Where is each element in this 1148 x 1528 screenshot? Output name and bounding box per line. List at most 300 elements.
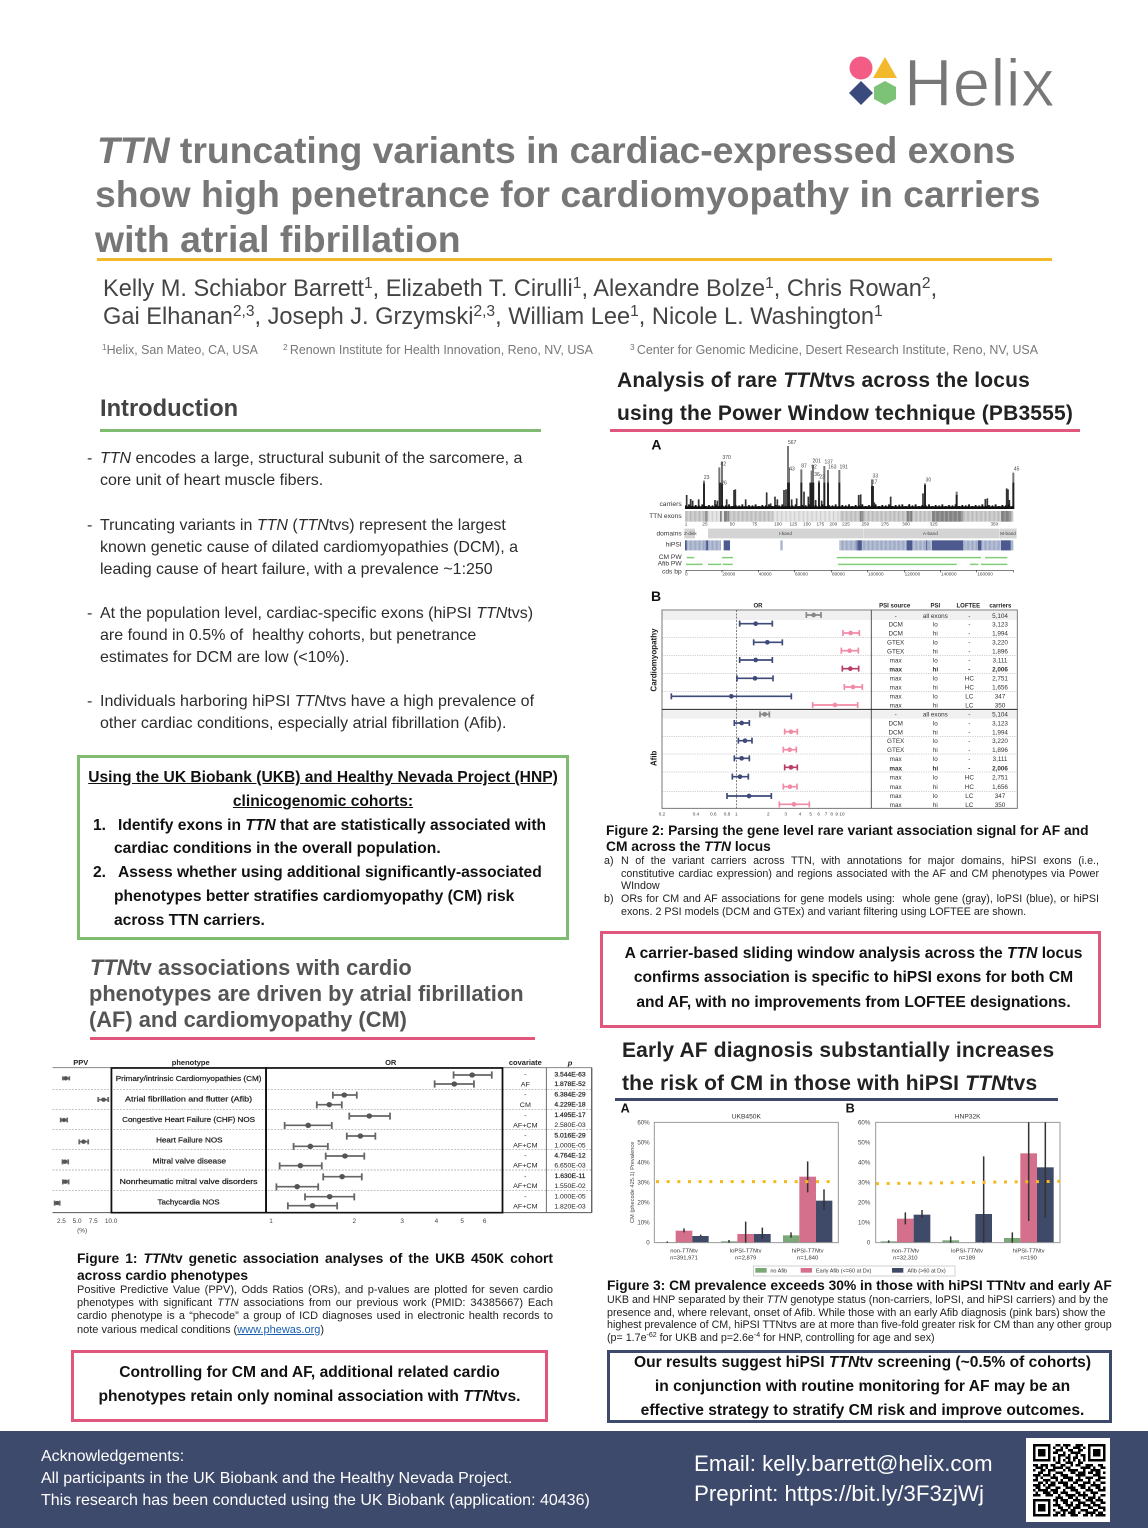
chart: figure 2B odds ratios: hi — [933, 685, 938, 692]
chart: figure 2A TTN locus: 225 — [842, 522, 850, 527]
chart: figure 1 forest plot: 1.820E-03 — [554, 1204, 586, 1210]
acknowledgements: All participants in the UK Biobank and the Healthy Nevada Project. — [41, 1470, 512, 1487]
chart: figure 2B odds ratios: HC — [965, 676, 974, 683]
footer band — [0, 1431, 1148, 1528]
chart: figure 2A TTN locus: carriers — [659, 501, 682, 508]
callout: conclusion: Our results suggest hiPSI TTNtv screening (~0.5% of cohorts) — [634, 1354, 1091, 1371]
chart: figure 2A TTN locus: I-band — [779, 531, 792, 536]
chart: figure 1 forest plot: Mitral valve disease — [152, 1157, 226, 1165]
chart: figure 1 forest plot: CM — [520, 1102, 531, 1109]
chart: figure 1 forest plot: AF — [521, 1082, 530, 1089]
chart: figure 3 bar charts: 0 — [867, 1240, 871, 1247]
chart: figure 2A TTN locus: 25 — [702, 522, 708, 527]
chart: figure 2B odds ratios: 1 — [735, 812, 738, 817]
caption: figure 1: Positive Predictive Value (PPV), Odds Ratios (ORs), and p-values are plotted for seven cardio — [77, 1284, 553, 1296]
chart: figure 3 bar charts: 50% — [637, 1139, 650, 1146]
chart: figure 2A TTN locus: 82 — [721, 461, 726, 467]
chart: figure 2A TTN locus: 100 — [774, 522, 782, 527]
chart: figure 2B odds ratios: - — [968, 622, 970, 629]
chart: figure 1 forest plot: AF+CM — [513, 1183, 538, 1190]
chart: figure 1 forest plot: AF+CM — [513, 1143, 538, 1149]
chart: figure 2B odds ratios: max — [890, 694, 902, 701]
chart: figure 2B odds ratios: 350 — [995, 703, 1006, 710]
chart: figure 2B odds ratios: all exons — [923, 613, 948, 620]
text block: introduction bullets: At the population level, cardiac-specific exons (hiPSI TTNtvs) — [100, 605, 533, 622]
chart: figure 2B odds ratios: 1,656 — [992, 784, 1008, 791]
chart: figure 1 forest plot: 1.550E-02 — [554, 1183, 586, 1190]
chart: figure 2B odds ratios: - — [968, 640, 970, 647]
chart: figure 1 forest plot: - — [524, 1133, 527, 1140]
chart: figure 1 forest plot: 1.000E-05 — [554, 1143, 586, 1149]
chart: figure 2B odds ratios: 6 — [817, 812, 820, 817]
chart: figure 1 forest plot: - — [524, 1194, 527, 1201]
chart: figure 1 forest plot: 3.544E-63 — [554, 1072, 586, 1078]
chart: figure 2B odds ratios: DCM — [888, 729, 903, 736]
chart: figure 2B odds ratios: 2,006 — [992, 765, 1008, 772]
chart: figure 2B odds ratios: 9 — [835, 812, 838, 817]
caption: figure 2: CM across the TTN locus — [606, 839, 771, 854]
chart: figure 2A TTN locus: 140000 — [941, 572, 957, 577]
chart: figure 2B odds ratios: lo — [933, 756, 938, 763]
text block: introduction bullets: other cardiac conditions, especially atrial fibrillation (Afib). — [100, 715, 506, 732]
callout: cohorts and aims: 2. — [93, 864, 106, 881]
chart: figure 2B odds ratios: - — [968, 712, 970, 719]
chart: figure 2B odds ratios: - — [968, 613, 970, 620]
chart: figure 2B odds ratios: 3,220 — [992, 640, 1008, 647]
chart: figure 2A TTN locus: A-band — [923, 531, 938, 536]
chart: figure 3 bar charts: 30% — [637, 1179, 650, 1186]
chart: figure 3 bar charts: 30% — [858, 1179, 871, 1186]
chart: figure 2B odds ratios: - — [968, 667, 970, 674]
chart: figure 1 forest plot: - — [524, 1174, 527, 1180]
chart: figure 2B odds ratios: 347 — [995, 793, 1006, 800]
chart: figure 1 forest plot: - — [524, 1153, 527, 1160]
chart: figure 2B odds ratios: HC — [965, 784, 974, 791]
chart: figure 1 forest plot: PPV — [73, 1058, 88, 1067]
chart: figure 2A TTN locus: 370 — [722, 455, 731, 461]
chart: figure 2B odds ratios: lo — [933, 640, 938, 647]
chart: figure 3 bar charts: 60% — [637, 1119, 650, 1126]
chart: figure 2A TTN locus: 100000 — [868, 572, 884, 577]
chart: figure 2B odds ratios: max — [890, 658, 902, 665]
chart: figure 2B odds ratios: hi — [933, 747, 938, 754]
chart: figure 1 forest plot: - — [524, 1092, 527, 1099]
heading: Early AF diagnosis: the risk of CM in those with hiPSI TTNtvs — [622, 1072, 1037, 1095]
caption: figure 2: exons. 2 PSI models (DCM and GTEx) and variant filtering using LOFTEE are shown. — [621, 906, 1026, 918]
chart: figure 2B odds ratios: hi — [933, 703, 938, 710]
chart: figure 3 bar charts: 40% — [858, 1159, 871, 1166]
chart: figure 2A TTN locus: 325 — [930, 522, 938, 527]
caption: figure 1: Figure 1: TTNtv genetic association analyses of the UKB 450K cohort — [77, 1251, 553, 1266]
chart: figure 1 forest plot: 1.000E-05 — [554, 1194, 586, 1200]
chart: figure 2A TTN locus: 80000 — [832, 572, 845, 577]
chart: figure 2B odds ratios: max — [890, 676, 902, 683]
chart: figure 2B odds ratios: hi — [933, 729, 938, 736]
chart: figure 3 bar charts: 20% — [858, 1200, 871, 1207]
chart: figure 3 bar charts: CM (phecode 425.1) Prevalence — [630, 1142, 636, 1223]
caption: figure 3: UKB and HNP separated by their TTN genotype status (non-carriers, loPSI, and hiPSI carriers) and by the — [607, 1294, 1108, 1306]
chart: figure 1 forest plot: 5 — [460, 1218, 464, 1225]
chart: figure 2B odds ratios: 5 — [809, 812, 812, 817]
caption: figure 2: Figure 2: Parsing the gene level rare variant association signal for AF and — [606, 823, 1089, 838]
chart: figure 1 forest plot: Atrial fibrillation and flutter (Afib) — [125, 1095, 253, 1103]
chart: figure 2B odds ratios: carriers — [989, 603, 1012, 609]
chart: figure 1 forest plot: 7.5 — [89, 1218, 98, 1225]
chart: figure 3 bar charts: hiPSI-TTNtv — [1013, 1248, 1045, 1254]
QR code — [1026, 1438, 1110, 1522]
text block: introduction bullets: TTN encodes a large, structural subunit of the sarcomere, a — [100, 450, 522, 467]
chart: figure 2B odds ratios: GTEX — [887, 648, 905, 655]
caption: figure 3: highest prevalence of CM, hiPSI TTNtvs are at more than five-fold greater risk for CM than any other group — [607, 1319, 1112, 1331]
heading: TTNtv associations — [89, 955, 524, 1032]
chart: figure 2A TTN locus: 40000 — [759, 572, 772, 577]
callout: controlling for CM and AF: Controlling for CM and AF, additional related cardio — [119, 1364, 500, 1381]
chart: figure 1 forest plot: Primary/intrinsic Cardiomyopathies (CM) — [116, 1074, 262, 1083]
chart: figure 2B odds ratios — [650, 590, 1018, 817]
chart: figure 2A TTN locus: 350 — [990, 522, 999, 527]
chart: figure 2B odds ratios: LC — [965, 802, 974, 809]
chart: figure 2A TTN locus: 60000 — [795, 572, 808, 577]
chart: figure 2A TTN locus: 1 — [685, 522, 688, 527]
chart: figure 2A TTN locus: CM PW — [659, 554, 682, 561]
chart: figure 2B odds ratios: 0.4 — [693, 812, 700, 817]
caption: figure 2: constitutive cardiac expression) and regions associated with the AF and CM phenotypes via Power — [621, 868, 1099, 880]
chart: figure 2B odds ratios: 2 — [767, 812, 770, 817]
chart: figure 2A TTN locus: 17 — [872, 480, 878, 486]
callout: cohorts and aims: clinicogenomic cohorts: — [233, 793, 413, 810]
text block: introduction bullets: leading cause of heart failure, with a prevalence ~1:250 — [100, 561, 493, 578]
chart: figure 2A TTN locus: 50 — [730, 522, 735, 527]
chart: figure 3 bar charts — [621, 1101, 1060, 1276]
chart: figure 2A TTN locus: 120000 — [905, 572, 921, 577]
chart: figure 2A TTN locus: 163 — [828, 464, 837, 470]
chart: figure 2B odds ratios: 3,220 — [992, 738, 1008, 745]
caption: figure 2: a) — [604, 855, 614, 867]
caption: figure 1: across cardio phenotypes — [77, 1268, 248, 1283]
callout: conclusion: effective strategy to stratify CM risk and improve outcomes. — [641, 1402, 1084, 1419]
chart: figure 2B odds ratios: lo — [933, 694, 938, 701]
chart: figure 2A TTN locus: 275 — [881, 522, 889, 527]
text block: introduction bullets — [87, 450, 534, 732]
chart: figure 2A TTN locus: M-band — [1000, 531, 1016, 536]
callout: cohorts and aims: Assess whether using additional significantly-associated — [118, 864, 542, 881]
chart: figure 3 bar charts: n=190 — [1020, 1256, 1038, 1262]
heading: TTNtv associations: (AF) and cardiomyopathy (CM) — [89, 1007, 407, 1032]
chart: figure 3 bar charts: n=391,971 — [670, 1256, 698, 1262]
chart: figure 2B odds ratios: lo — [933, 720, 938, 727]
chart: figure 1 forest plot: 10.0 — [105, 1218, 118, 1225]
text block: introduction bullets: - — [87, 605, 92, 622]
chart: figure 1 forest plot: (%) — [77, 1228, 87, 1235]
chart: figure 2A TTN locus: 0 — [685, 572, 688, 577]
affiliations: 2 Renown Institute for Health Innovation, Reno, NV, USA — [283, 343, 593, 357]
callout: sliding window result — [600, 931, 1101, 1028]
acknowledgements: This research has been conducted using the UK Biobank (application: 40436) — [41, 1492, 590, 1509]
chart: figure 3 bar charts: 10% — [637, 1220, 650, 1227]
chart: figure 2B odds ratios: - — [968, 720, 970, 727]
text block: introduction bullets: - — [87, 450, 92, 467]
chart: figure 2A TTN locus: 201 — [812, 458, 821, 464]
chart: figure 2A TTN locus: 45 — [1014, 467, 1020, 473]
caption: figure 1 — [77, 1251, 553, 1336]
chart: figure 2B odds ratios: 0.2 — [659, 812, 666, 817]
chart: figure 1 forest plot: Heart Failure NOS — [156, 1136, 222, 1145]
chart: figure 2B odds ratios: 350 — [995, 802, 1006, 809]
title: show high penetrance for cardiomyopathy in carriers — [95, 173, 1040, 215]
chart: figure 2B odds ratios: 3,123 — [992, 622, 1008, 629]
callout: cohorts and aims — [77, 755, 569, 940]
chart: figure 1 forest plot: OR — [385, 1058, 397, 1067]
chart: figure 1 forest plot: AF+CM — [513, 1123, 538, 1129]
chart: figure 2B odds ratios: hi — [933, 765, 938, 772]
callout: cohorts and aims: cardiac conditions in the overall population. — [114, 840, 441, 857]
text block: introduction bullets: - — [87, 693, 92, 710]
heading: Early AF diagnosis: Early AF diagnosis substantially increases — [622, 1039, 1054, 1062]
chart: figure 2B odds ratios: GTEX — [887, 640, 905, 647]
chart: figure 2A TTN locus: 137 — [824, 460, 833, 466]
caption: figure 1: phenotypes with significant TTN associations from our previous work (PMID: 34385667) Each — [77, 1297, 553, 1309]
chart: figure 1 forest plot: 6.650E-03 — [554, 1163, 586, 1170]
contact details — [694, 1451, 993, 1506]
chart: figure 2A TTN locus: 175 — [816, 522, 825, 527]
chart: figure 2A TTN locus: 160000 — [977, 572, 993, 577]
chart: figure 2A TTN locus: 300 — [902, 522, 910, 527]
chart: figure 2B odds ratios: max — [890, 784, 902, 791]
chart: figure 2B odds ratios: - — [968, 747, 970, 754]
chart: figure 2B odds ratios: GTEX — [887, 738, 905, 745]
chart: figure 2B odds ratios: OR — [754, 603, 763, 609]
chart: figure 1 forest plot: 3 — [400, 1218, 404, 1225]
chart: figure 2A TTN locus: 30 — [926, 477, 931, 483]
chart: figure 3 bar charts: n=32,310 — [893, 1256, 918, 1262]
chart: figure 3 bar charts: Early Afib (<=60 at Dx) — [816, 1268, 871, 1274]
caption: figure 3: presence and, where relevant, onset of Afib. While those with an early Afib diagnosis (pink bars) show the — [607, 1307, 1105, 1319]
text block: introduction bullets: Individuals harboring hiPSI TTNtvs have a high prevalence of — [100, 693, 534, 710]
chart: figure 1 forest plot: 4.764E-12 — [554, 1153, 586, 1160]
chart: figure 2B odds ratios: 0.8 — [724, 812, 731, 817]
chart: figure 2B odds ratios: lo — [933, 738, 938, 745]
title — [94, 129, 1040, 260]
chart: figure 2A TTN locus: hiPSI — [666, 542, 682, 549]
chart: figure 2B odds ratios: 1,656 — [992, 685, 1008, 692]
chart: figure 2A TTN locus: Z-disk — [684, 531, 697, 536]
chart: figure 3 bar charts: n=189 — [959, 1256, 975, 1262]
chart: figure 2B odds ratios: - — [968, 738, 970, 745]
chart: figure 2B odds ratios: GTEX — [887, 747, 905, 754]
caption: figure 2: N of the variant carriers across TTN, with annotations for major domains, hiPSI exons (i.e., — [621, 855, 1099, 867]
chart: figure 2B odds ratios: DCM — [888, 631, 903, 638]
chart: figure 2B odds ratios: max — [890, 756, 902, 763]
chart: figure 2B odds ratios: HC — [965, 774, 974, 781]
contact details: Email: kelly.barrett@helix.com — [694, 1451, 993, 1476]
chart: figure 2B odds ratios: max — [890, 793, 902, 800]
chart: figure 2B odds ratios: 7 — [825, 812, 828, 817]
chart: figure 2A TTN locus: 23 — [704, 475, 710, 481]
chart: figure 2A TTN locus: 26 — [721, 480, 727, 486]
chart: figure 2B odds ratios: DCM — [888, 720, 903, 727]
caption: figure 1: note various medical conditions (www.phewas.org) — [77, 1324, 324, 1336]
chart: figure 2A TTN locus: TTN exons — [649, 513, 682, 520]
chart: figure 2B odds ratios: 2,006 — [992, 667, 1008, 674]
caption: figure 2: b) — [604, 893, 614, 905]
chart: figure 1 forest plot: - — [524, 1072, 527, 1079]
chart: figure 1 forest plot: 1 — [269, 1218, 273, 1225]
affiliations: 1Helix, San Mateo, CA, USA — [102, 343, 258, 357]
chart: figure 1 forest plot: 1.630E-11 — [555, 1173, 586, 1180]
caption: figure 2 — [604, 823, 1099, 918]
chart: figure 2B odds ratios: PSI source — [879, 603, 911, 609]
chart: figure 2A TTN locus: 33 — [873, 473, 878, 479]
chart: figure 1 forest plot: phenotype — [172, 1058, 210, 1067]
title: TTN truncating variants in cardiac-expressed exons — [97, 129, 1016, 171]
callout: controlling for CM and AF: phenotypes retain only nominal association with TTNtvs. — [99, 1388, 520, 1405]
chart: figure 3 bar charts: loPSI-TTNtv — [951, 1248, 983, 1254]
chart: figure 2B odds ratios: - — [968, 648, 970, 655]
chart: figure 2A TTN locus: 43 — [789, 467, 795, 473]
callout: cohorts and aims: phenotypes better stratifies cardiomyopathy (CM) risk — [114, 888, 514, 905]
callout: conclusion — [607, 1350, 1112, 1423]
chart: figure 2B odds ratios: 2,751 — [992, 676, 1008, 683]
chart: figure 1 forest plot: 2.5 — [57, 1218, 66, 1225]
chart: figure 1 forest plot: AF+CM — [513, 1204, 538, 1211]
acknowledgements: Acknowledgements: — [41, 1448, 184, 1465]
chart: figure 2B odds ratios: HC — [965, 685, 974, 692]
chart: figure 2B odds ratios: LC — [965, 793, 974, 800]
chart: figure 2B odds ratios: max — [889, 765, 902, 772]
chart: figure 2B odds ratios: - — [968, 631, 970, 638]
chart: figure 2B odds ratios: 347 — [995, 694, 1006, 701]
chart: figure 1 forest plot: 4 — [435, 1218, 439, 1225]
callout: cohorts and aims: Identify exons in TTN that are statistically associated with — [118, 817, 546, 834]
chart: figure 2B odds ratios: 1,994 — [992, 631, 1008, 638]
callout: cohorts and aims: Using the UK Biobank (UKB) and Healthy Nevada Project (HNP) — [88, 769, 558, 786]
chart: figure 2A TTN locus — [649, 436, 1020, 577]
caption: figure 3: Figure 3: CM prevalence exceeds 30% in those with hiPSI TTNtv and early AF — [607, 1278, 1112, 1293]
chart: figure 2B odds ratios: PSI — [930, 603, 941, 609]
chart: figure 3 bar charts: 50% — [858, 1139, 871, 1146]
chart: figure 2A TTN locus: 92 — [811, 465, 817, 471]
chart: figure 2A TTN locus: 200 — [829, 522, 838, 527]
chart: figure 2B odds ratios: 3,111 — [993, 658, 1008, 665]
chart: figure 2B odds ratios: 3,111 — [993, 756, 1008, 763]
chart: figure 3 bar charts: B — [846, 1101, 855, 1115]
chart: figure 2B odds ratios: 1,994 — [992, 729, 1008, 736]
chart: figure 3 bar charts: 0 — [646, 1240, 650, 1247]
chart: figure 1 forest plot: 1.495E-17 — [554, 1112, 586, 1119]
chart: figure 2A TTN locus: Afib PW — [658, 560, 682, 567]
chart: figure 2A TTN locus: 36 — [814, 472, 820, 478]
chart: figure 2B odds ratios: LOFTEE — [956, 603, 980, 609]
authors: Kelly M. Schiabor Barrett1, Elizabeth T. Cirulli1, Alexandre Bolze1, Chris Rowan2, — [103, 275, 937, 302]
chart: figure 1 forest plot: 5.016E-29 — [554, 1133, 586, 1139]
chart: figure 3 bar charts: 40% — [637, 1159, 650, 1166]
chart: figure 2B odds ratios: lo — [933, 793, 938, 800]
heading: Power Window analysis: Analysis of rare TTNtvs across the locus — [617, 369, 1030, 392]
chart: figure 1 forest plot: covariate — [509, 1058, 542, 1067]
chart: figure 2B odds ratios: 8 — [830, 812, 833, 817]
chart: figure 2B odds ratios: - — [968, 729, 970, 736]
callout: sliding window result: confirms association is specific to hiPSI exons for both CM — [634, 969, 1073, 986]
text block: introduction bullets: Truncating variants in TTN (TTNtvs) represent the largest — [100, 517, 506, 534]
chart: figure 1 forest plot: 2.580E-03 — [554, 1122, 586, 1129]
chart: figure 1 forest plot: 2 — [353, 1218, 357, 1225]
chart: figure 1 forest plot: Tachycardia NOS — [158, 1198, 220, 1207]
chart: figure 1 forest plot: p — [567, 1059, 573, 1067]
chart: figure 1 forest plot: AF+CM — [513, 1163, 538, 1170]
chart: figure 2B odds ratios: 3,123 — [992, 720, 1008, 727]
heading: Early AF diagnosis — [622, 1039, 1054, 1095]
chart: figure 2A TTN locus: 87 — [801, 463, 807, 469]
chart: figure 2B odds ratios: - — [895, 613, 897, 620]
caption: figure 3: (p= 1.7e-62 for UKB and p=2.6e-4 for HNP, controlling for age and sex) — [607, 1332, 935, 1344]
callout: cohorts and aims: across TTN carriers. — [114, 912, 265, 929]
chart: figure 2A TTN locus: 23 — [819, 474, 825, 480]
chart: figure 2B odds ratios: 10 — [839, 812, 845, 817]
heading: TTNtv associations: TTNtv associations with cardio — [90, 955, 412, 980]
chart: figure 1 forest plot: 1.878E-52 — [554, 1081, 586, 1088]
callout: sliding window result: and AF, with no improvements from LOFTEE designations. — [636, 994, 1071, 1011]
chart: figure 1 forest plot: 6 — [483, 1218, 487, 1225]
chart: figure 2B odds ratios: hi — [933, 802, 938, 809]
chart: figure 2B odds ratios: 0.6 — [710, 812, 717, 817]
chart: figure 2B odds ratios: hi — [933, 631, 938, 638]
chart: figure 1 forest plot: 6.384E-29 — [554, 1092, 586, 1099]
chart: figure 2B odds ratios: hi — [933, 667, 938, 674]
heading: Power Window analysis — [617, 369, 1073, 425]
chart: figure 2B odds ratios: - — [968, 756, 970, 763]
chart: figure 2B odds ratios: 5,104 — [992, 613, 1008, 620]
chart: figure 2B odds ratios: all exons — [923, 712, 948, 719]
chart: figure 2B odds ratios: 4 — [799, 812, 802, 817]
affiliations: 3 Center for Genomic Medicine, Desert Research Institute, Reno, NV, USA — [630, 343, 1038, 357]
chart: figure 2B odds ratios: lo — [933, 622, 938, 629]
chart: figure 2B odds ratios: 3 — [784, 812, 787, 817]
caption: figure 3 — [607, 1278, 1112, 1344]
chart: figure 1 forest plot: 4.229E-18 — [554, 1102, 586, 1109]
chart: figure 2B odds ratios: - — [968, 658, 970, 665]
chart: figure 3 bar charts: non-TTNtv — [892, 1248, 919, 1254]
chart: figure 2B odds ratios: lo — [933, 658, 938, 665]
callout: controlling for CM and AF — [71, 1350, 548, 1422]
chart: figure 2B odds ratios: max — [890, 685, 902, 692]
chart: figure 2B odds ratios: lo — [933, 774, 938, 781]
chart: figure 2B odds ratios: - — [895, 712, 897, 719]
chart: figure 2B odds ratios: hi — [933, 648, 938, 655]
chart: figure 3 bar charts: 10% — [858, 1220, 871, 1227]
caption: figure 2: WIndow — [621, 880, 660, 892]
chart: figure 2A TTN locus: 567 — [788, 440, 797, 446]
chart: figure 2A TTN locus: domains — [656, 531, 682, 538]
chart: figure 3 bar charts: 60% — [858, 1119, 871, 1126]
chart: figure 2A TTN locus: A — [651, 436, 661, 452]
chart: figure 2B odds ratios: max — [890, 774, 902, 781]
chart: figure 2B odds ratios: 2,751 — [992, 774, 1008, 781]
chart: figure 2A TTN locus: 250 — [861, 522, 870, 527]
chart: figure 2B odds ratios: DCM — [888, 622, 903, 629]
chart: figure 2B odds ratios: LC — [965, 703, 974, 710]
chart: figure 2A TTN locus: 75 — [752, 522, 758, 527]
contact details: Preprint: https://bit.ly/3F3zjWj — [694, 1481, 984, 1506]
chart: figure 2B odds ratios: Cardiomyopathy — [650, 628, 659, 692]
text block: introduction bullets: estimates for DCM are low (<10%). — [100, 649, 349, 666]
chart: figure 2A TTN locus: 125 — [789, 522, 798, 527]
callout: sliding window result: A carrier-based sliding window analysis across the TTN locus — [625, 945, 1082, 962]
chart: figure 1 forest plot — [52, 1058, 592, 1235]
chart: figure 1 forest plot: Congestive Heart Failure (CHF) NOS — [122, 1115, 255, 1124]
text block: introduction bullets: core unit of heart muscle fibers. — [100, 472, 323, 489]
callout: cohorts and aims: 1. — [93, 817, 106, 834]
chart: figure 2B odds ratios: 1,896 — [992, 648, 1008, 655]
